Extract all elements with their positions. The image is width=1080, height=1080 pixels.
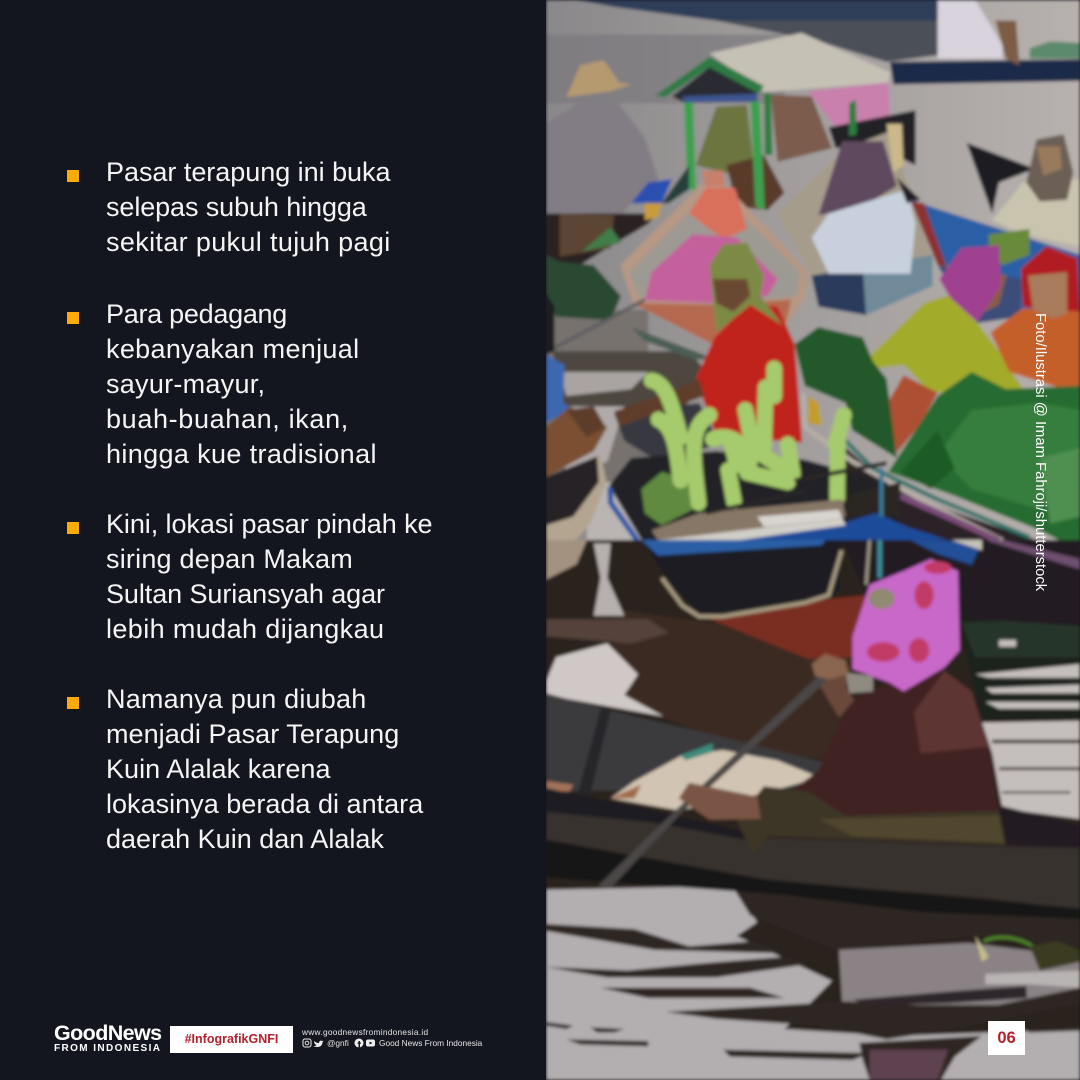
central boat hull continuation [641,540,842,619]
page number [988,1021,1025,1055]
bullet block: opening hours: selepas subuh hingga [106,192,367,222]
bullet block: opening hours [67,157,391,257]
bullet block: new name: lokasinya berada di antara [106,789,423,819]
bullet block: new location: lebih mudah dijangkau [106,614,384,644]
top boat [577,0,941,31]
right dark boat hull [839,448,1080,551]
man with straw hat [566,60,631,97]
leaves at left [546,255,621,320]
bullet block: new location: Kini, lokasi pasar pindah ke [106,509,432,539]
panel: dark text column [0,0,546,1080]
left person blue shirt [546,293,555,355]
logo: GoodNews From Indonesia: FROM INDONESIA [54,1043,161,1054]
bullet block: goods sold: buah-buahan, ikan, [106,404,349,434]
person right with hijab [967,143,1035,214]
bullet block: new name: menjadi Pasar Terapung [106,719,399,749]
photo: floating market boats and traders [546,0,1080,1080]
photo credit: Foto/Ilustrasi @ Imam Fahroji/shutterstock [1032,313,1048,591]
red scarf woman [990,308,1080,394]
hashtag badge: #InfografikGNFI [185,1032,278,1046]
foreground boat [546,693,830,791]
website and social handles: Good News From Indonesia [379,1038,482,1048]
pink hull boat [620,183,809,346]
canopy [709,33,890,92]
bullet block: opening hours: Pasar terapung ini buka [106,157,390,187]
hashtag badge [170,1026,293,1053]
bullet block: new location [67,509,432,644]
rear boat with white shirt [778,127,931,310]
bullet block: new location: Sultan Suriansyah agar [106,579,385,609]
website and social handles [302,1027,482,1048]
woman paddling [764,671,999,828]
bullet block: goods sold: sayur-mayur, [106,369,265,399]
bullet block: new name: daerah Kuin dan Alalak [106,824,384,854]
logo: GoodNews From Indonesia: GoodNews [54,1021,162,1045]
bullet block: new name: Kuin Alalak karena [106,754,331,784]
website and social handles: www.goodnewsfromindonesia.id [302,1027,428,1037]
bullet block: goods sold: kebanyakan menjual [106,334,359,364]
woman in red shirt [614,403,720,461]
central boat [609,451,907,551]
bullet block: goods sold: hingga kue tradisional [106,439,377,469]
bullet block: new name [67,684,424,854]
floating vegetation [984,937,1067,960]
purple scarf woman [979,272,1006,313]
bullet block: goods sold [67,299,377,469]
bullet block: new location: siring depan Makam [106,544,353,574]
bullet block: goods sold: Para pedagang [106,299,287,329]
water [546,540,1080,1080]
greens [795,327,897,458]
central boat oar [555,300,645,348]
page number: 06 [997,1029,1016,1047]
website and social handles: @gnfi [327,1038,349,1048]
bullet block: opening hours: sekitar pukul tujuh pagi [106,227,391,257]
blue boat right [910,200,1080,315]
bullet block: new name: Namanya pun diubah [106,684,366,714]
lower water [546,886,1080,1080]
